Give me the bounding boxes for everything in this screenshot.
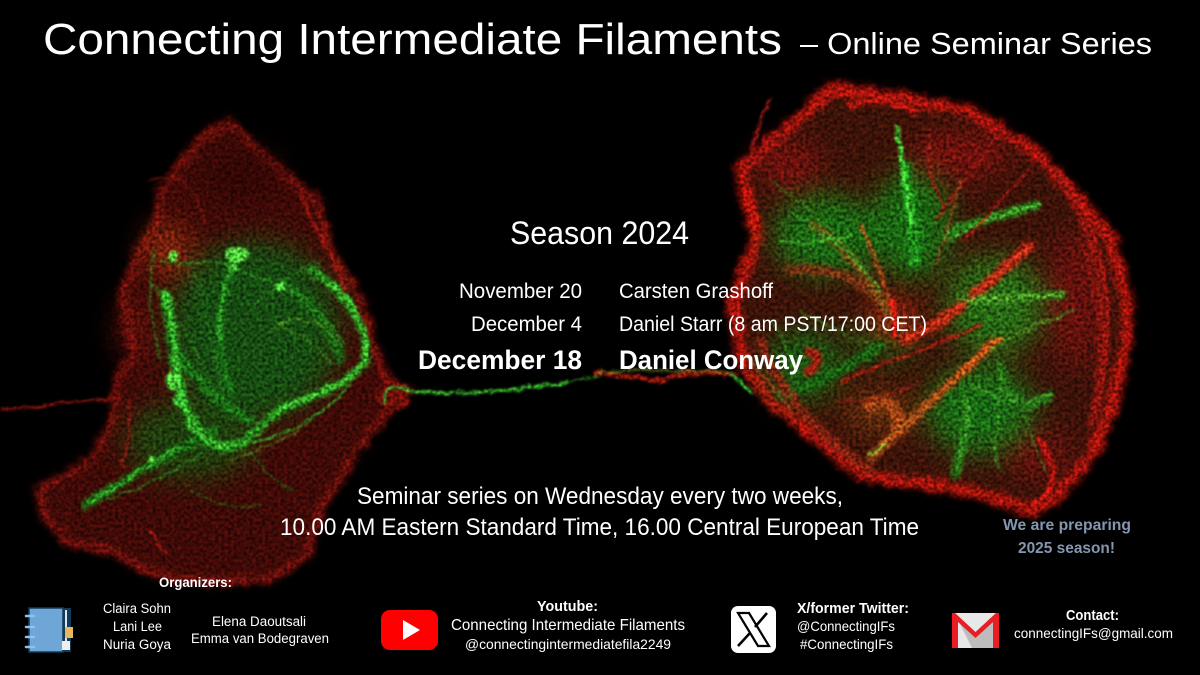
icon: Gmail <box>952 613 999 648</box>
callout: 2025 season <box>1003 517 1131 557</box>
X contact text <box>797 601 909 652</box>
icon: X <box>731 606 776 653</box>
icon: YouTube <box>381 610 438 650</box>
X contact text: #ConnectingIFs <box>800 636 893 652</box>
Youtube contact text: @connectingintermediatefila2249 <box>465 636 671 652</box>
title: – Online Seminar Series <box>800 26 1152 61</box>
X contact text: @ConnectingIFs <box>797 618 895 634</box>
callout: 2025 season: 2025 season! <box>1018 540 1115 557</box>
heading: season: Season 2024 <box>510 215 689 251</box>
contact text <box>1014 608 1173 641</box>
schedule: dates and speakers: December 18 <box>418 345 582 375</box>
title: Connecting Intermediate Filaments <box>43 15 782 64</box>
contact text: Contact: <box>1066 608 1119 624</box>
micrograph: left cell <box>40 122 410 582</box>
contact text: connectingIFs@gmail.com <box>1014 625 1173 641</box>
organizers heading: Organizers: <box>159 574 232 590</box>
icon: notebook <box>26 608 73 652</box>
schedule: dates and speakers: November 20 <box>459 280 582 303</box>
Youtube contact text: Connecting Intermediate Filaments <box>451 617 685 634</box>
micrograph: cells <box>2 88 1127 582</box>
schedule: dates and speakers: Daniel Conway <box>619 345 803 375</box>
organizer names: Emma van Bodegraven <box>191 631 329 646</box>
X contact text: X/former Twitter: <box>797 601 909 617</box>
organizer names <box>103 601 329 652</box>
title <box>43 15 1152 64</box>
Youtube contact text: Youtube: <box>537 599 598 615</box>
seminar time note <box>280 483 919 541</box>
seminar time note: Seminar series on Wednesday every two weeks, <box>357 483 843 510</box>
organizer names: Claira Sohn <box>103 601 171 616</box>
schedule: dates and speakers: Carsten Grashoff <box>619 280 773 303</box>
schedule: dates and speakers: December 4 <box>471 313 582 336</box>
organizer names: Nuria Goya <box>103 637 171 652</box>
micrograph: right cell <box>733 88 1127 510</box>
schedule: dates and speakers: Daniel Starr (8 am PST/17:00 CET) <box>619 313 927 336</box>
micrograph: thin filament tail and bridge between cells <box>2 370 752 411</box>
organizer names: Elena Daoutsali <box>212 614 306 629</box>
seminar time note: 10.00 AM Eastern Standard Time, 16.00 Central European Time <box>280 514 919 541</box>
Youtube contact text <box>451 599 685 652</box>
callout: 2025 season: We are preparing <box>1003 517 1131 534</box>
schedule: dates and speakers <box>418 280 927 375</box>
organizer names: Lani Lee <box>113 619 162 634</box>
